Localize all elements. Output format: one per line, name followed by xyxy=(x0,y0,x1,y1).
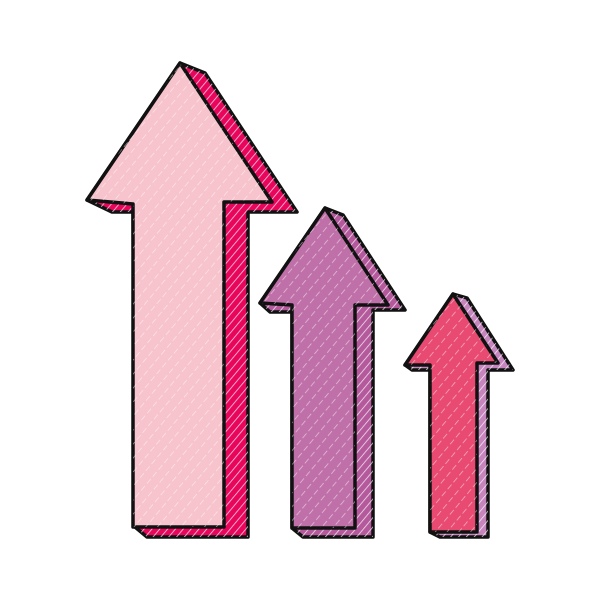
arrow: small red xyxy=(405,294,513,537)
arrow: medium purple xyxy=(260,208,405,537)
arrow: large pink xyxy=(87,63,297,537)
